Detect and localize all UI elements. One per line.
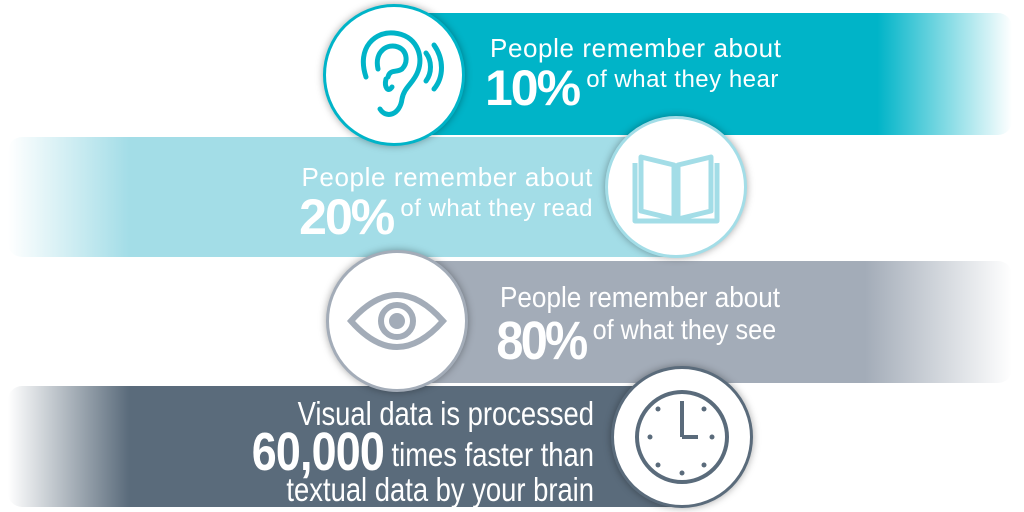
band 1: hear xyxy=(400,13,1012,135)
text: 10% hear: 10% of what they hear xyxy=(485,60,779,116)
text: 20% read xyxy=(299,162,593,245)
text: 10% hear: People remember about xyxy=(490,33,782,63)
text: 20% read: People remember about xyxy=(301,162,593,192)
band 4: visual data xyxy=(8,386,680,507)
text: 60,000: textual data by your brain xyxy=(286,471,594,508)
icon circle: ear xyxy=(323,4,465,146)
text: 80% see xyxy=(496,282,780,371)
text: 60,000: 60,000 times faster than xyxy=(252,422,594,482)
icon circle: eye xyxy=(326,250,468,392)
icon circle: book xyxy=(605,116,747,258)
text: 60,000 xyxy=(252,395,594,508)
text: 20% read: 20% of what they read xyxy=(299,189,593,245)
text: 80% see: 80% of what they see xyxy=(496,311,776,371)
band 3: see xyxy=(400,261,1012,383)
icon circle: clock xyxy=(611,366,753,508)
text: 60,000: Visual data is processed xyxy=(298,395,594,432)
band 2: read xyxy=(8,137,680,257)
text: 10% hear xyxy=(485,33,782,116)
text: 80% see: People remember about xyxy=(500,282,780,314)
